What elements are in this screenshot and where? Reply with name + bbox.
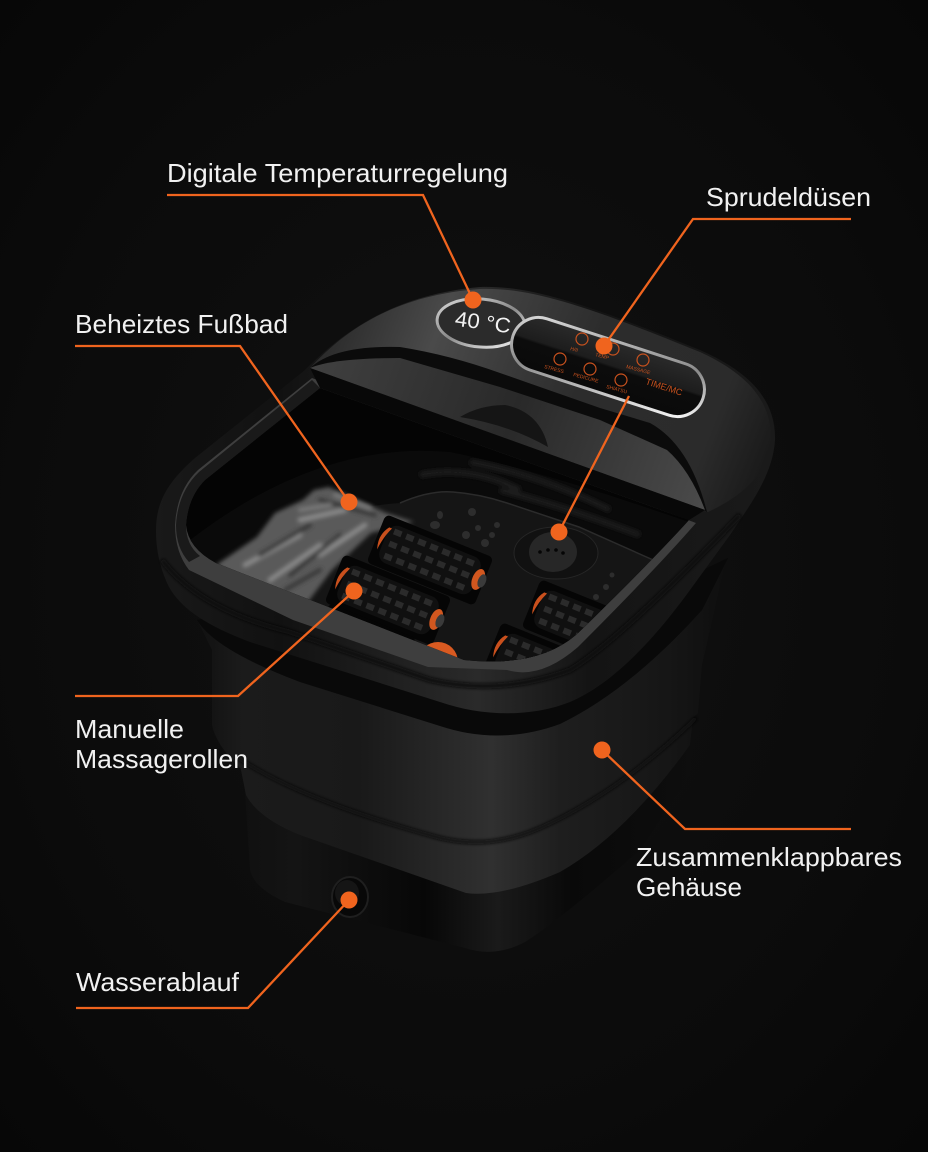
basin interior bbox=[186, 388, 689, 662]
panel labels: TEMP bbox=[594, 352, 610, 362]
lid front band shadow bbox=[310, 368, 705, 520]
collapsible lower band bbox=[236, 680, 697, 894]
water ripple bbox=[216, 487, 414, 603]
callout: Zusammenklappbares Gehäuse: Gehäuse bbox=[636, 872, 742, 902]
callout: Sprudeldüsen: Sprudeldüsen bbox=[706, 182, 871, 212]
back wall bbox=[190, 524, 686, 564]
lid thumb notch bbox=[460, 405, 548, 447]
callout: Manuelle Massagerollen bbox=[75, 582, 362, 774]
small jet dots bbox=[430, 508, 614, 600]
rim lip shadow bbox=[162, 515, 740, 686]
control panel bbox=[505, 310, 711, 424]
collapsible upper band bbox=[197, 560, 726, 841]
panel labels: PEDICURE bbox=[572, 372, 600, 385]
panel labels: SHIATSU bbox=[605, 384, 628, 396]
callout: Digitale Temperaturregelung: Digitale Temperaturregelung bbox=[167, 158, 508, 188]
lid top surface bbox=[310, 289, 771, 512]
callout: Sprudeldüsen bbox=[550, 182, 871, 540]
foot roller lower right bbox=[486, 624, 560, 662]
callout: Zusammenklappbares Gehäuse: Zusammenklappbares bbox=[636, 842, 902, 872]
panel labels: H/II bbox=[569, 346, 579, 354]
lid front band bbox=[310, 358, 705, 510]
massage jet bbox=[514, 527, 598, 579]
base section bbox=[245, 700, 696, 952]
rim grey ring bbox=[175, 378, 696, 672]
display readout: 40 °C bbox=[454, 308, 512, 338]
panel buttons bbox=[554, 333, 649, 386]
foot roller lower left bbox=[324, 554, 453, 647]
panel labels: MASSAGE bbox=[625, 364, 652, 377]
callout: Beheiztes Fußbad: Beheiztes Fußbad bbox=[75, 309, 288, 339]
callout: Zusammenklappbares Gehäuse bbox=[594, 742, 902, 902]
temperature display bbox=[435, 295, 527, 351]
wall ripples bbox=[420, 462, 640, 535]
orange knob bbox=[426, 642, 458, 658]
callout: Manuelle Massagerollen: Manuelle bbox=[75, 714, 184, 744]
panel labels bbox=[543, 346, 684, 398]
callout: Wasserablauf: Wasserablauf bbox=[76, 967, 240, 997]
callout: Manuelle Massagerollen: Massagerollen bbox=[75, 744, 248, 774]
rim top-left dark edge bbox=[176, 380, 320, 562]
product: foot bath bbox=[156, 287, 775, 952]
foot roller upper left bbox=[366, 514, 495, 607]
foot roller upper right bbox=[523, 580, 606, 644]
panel labels: TIME/MC bbox=[644, 376, 684, 398]
foot roller lower strip bbox=[328, 605, 414, 640]
lid groove bbox=[310, 347, 707, 512]
ripple mottling bbox=[245, 495, 375, 590]
floor ridge bbox=[400, 492, 660, 563]
panel labels: STRESS bbox=[543, 364, 565, 375]
callout: Wasserablauf bbox=[76, 892, 358, 1008]
callout: Beheiztes Fußbad bbox=[75, 309, 358, 510]
rim outer bbox=[156, 287, 775, 713]
band crease bbox=[237, 718, 696, 842]
callout: Digitale Temperaturregelung bbox=[167, 158, 508, 308]
basin floor bbox=[312, 492, 651, 661]
drain plug bbox=[332, 877, 368, 917]
rim underside shadow bbox=[197, 558, 728, 736]
